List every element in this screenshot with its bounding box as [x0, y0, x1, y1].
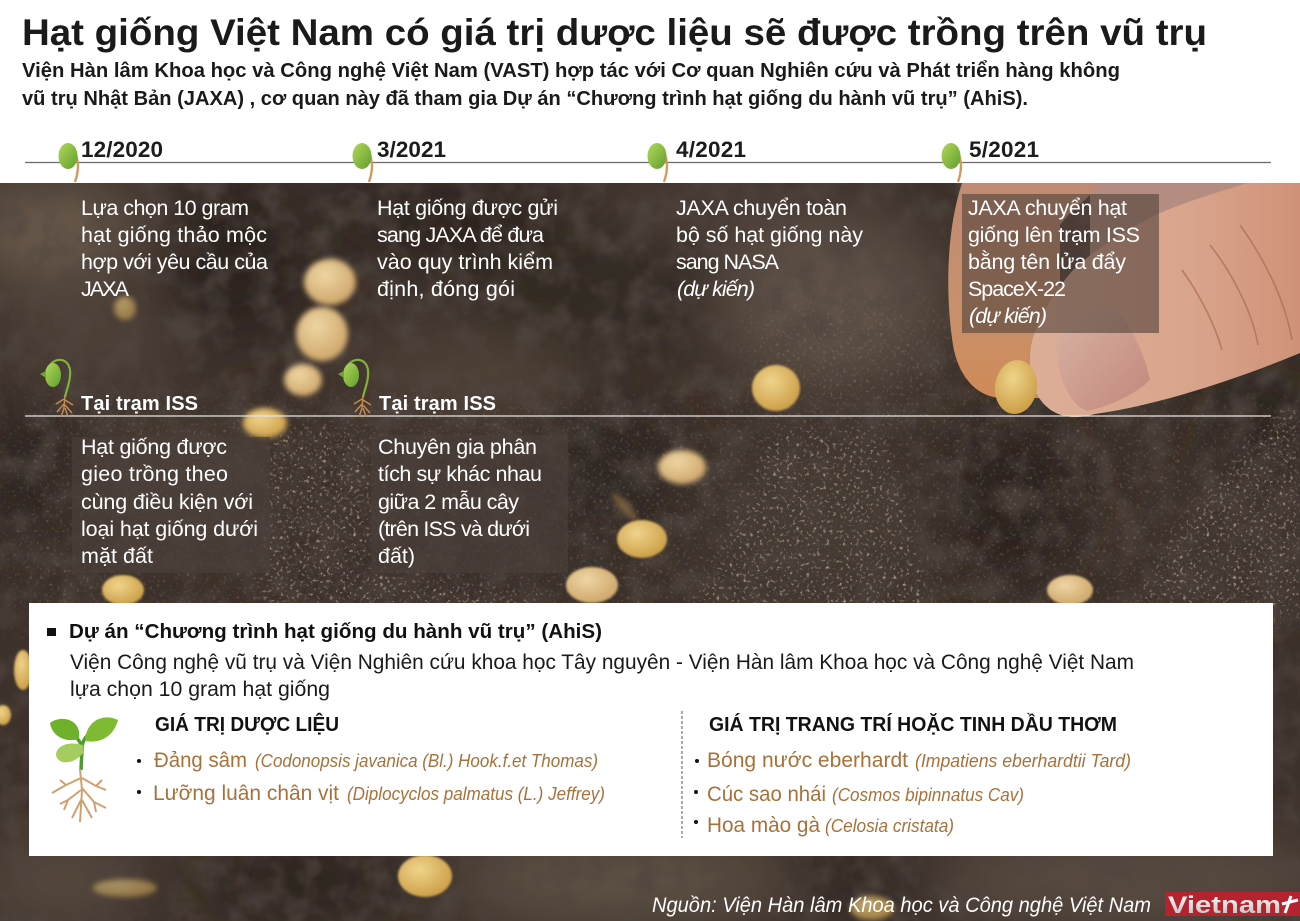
station stage 1: mặt đất — [81, 544, 153, 568]
column: decorative and aromatic value: Bóng nước eberhardt — [707, 749, 908, 772]
milestone 4/2021: 4/2021 — [676, 137, 746, 162]
column: medicinal value: Lưỡng luân chân vịt — [153, 782, 339, 805]
milestone 12/2020: JAXA — [81, 277, 130, 301]
logo: Vietnam+ — [1165, 892, 1300, 919]
station stage 2: Chuyên gia phân — [378, 435, 537, 459]
icon: sprout — [338, 360, 371, 417]
column: decorative and aromatic value: Cúc sao nhái — [707, 783, 826, 806]
milestone 5/2021 — [942, 137, 1159, 333]
text box — [962, 194, 1159, 333]
milestone 4/2021: bộ số hạt giống này — [676, 223, 863, 247]
timeline lower axis — [25, 415, 1271, 417]
milestone 5/2021: (dự kiến) — [969, 304, 1047, 328]
station stage 1 — [40, 360, 270, 573]
station stage 2 — [338, 360, 568, 573]
column: decorative and aromatic value: (Cosmos bipinnatus Cav) — [832, 785, 1024, 805]
source: Nguồn: Viện Hàn lâm Khoa học và Công nghệ Việt Nam — [652, 894, 1151, 917]
milestone 5/2021: bằng tên lửa đẩy — [968, 249, 1126, 274]
title: Hạt giống Việt Nam có giá trị dược liệu sẽ được trồng trên vũ trụ — [22, 12, 1207, 53]
milestone 3/2021: sang JAXA để đưa — [377, 223, 544, 247]
panel: AhiS project — [29, 603, 1273, 856]
seeds — [0, 259, 1093, 920]
milestone 12/2020: hợp với yêu cầu của — [81, 250, 268, 274]
panel description: Viện Công nghệ vũ trụ và Viện Nghiên cứu khoa học Tây nguyên - Viện Hàn lâm Khoa học và Công nghệ Việt Nam — [70, 651, 1134, 674]
milestone 4/2021: JAXA chuyển toàn — [676, 196, 847, 220]
milestone 4/2021: sang NASA — [676, 250, 780, 274]
icon: seed — [352, 143, 372, 182]
column: medicinal value: Đảng sâm — [154, 749, 247, 772]
panel description: lựa chọn 10 gram hạt giống — [70, 678, 330, 701]
timeline top axis — [25, 162, 1271, 164]
station stage 1: Tại trạm ISS — [81, 393, 198, 415]
column: decorative and aromatic value: (Impatiens eberhardtii Tard) — [915, 751, 1131, 771]
intro text: vũ trụ Nhật Bản (JAXA) , cơ quan này đã tham gia Dự án “Chương trình hạt giống du hành vũ trụ” (AhiS). — [22, 88, 1028, 110]
logo: Vietnam+: Vietnam — [1168, 892, 1281, 919]
column: decorative and aromatic value — [694, 713, 1131, 837]
sharp soil texture — [0, 290, 1300, 638]
milestone 4/2021: (dự kiến) — [677, 277, 755, 301]
milestone 3/2021: định, đóng gói — [377, 277, 515, 301]
station stage 1: Hạt giống được — [81, 435, 227, 459]
milestone 5/2021: 5/2021 — [969, 137, 1039, 162]
column: medicinal value: GIÁ TRỊ DƯỢC LIỆU — [155, 712, 339, 736]
station stage 2: (trên ISS và dưới — [378, 517, 530, 541]
station stage 2: giữa 2 mẫu cây — [378, 489, 519, 514]
column: decorative and aromatic value: Hoa mào gà — [707, 814, 820, 837]
station stage 2: đất) — [378, 544, 415, 568]
text box — [72, 437, 270, 573]
panel description — [70, 651, 1134, 701]
icon: plant with roots — [50, 717, 118, 822]
milestone 12/2020: hạt giống thảo mộc — [81, 223, 267, 247]
column: medicinal value — [137, 712, 605, 805]
station stage 1: loại hạt giống dưới — [81, 517, 258, 541]
milestone 12/2020: 12/2020 — [81, 137, 163, 162]
panel heading: Dự án “Chương trình hạt giống du hành vũ trụ” (AhiS) — [69, 621, 602, 643]
milestone 5/2021: SpaceX-22 — [968, 277, 1066, 301]
station stage 1: gieo trồng theo — [81, 462, 228, 486]
column: medicinal value: (Diplocyclos palmatus (L.) Jeffrey) — [347, 784, 605, 804]
column: medicinal value: (Codonopsis javanica (Bl.) Hook.f.et Thomas) — [255, 751, 598, 771]
column: decorative and aromatic value: GIÁ TRỊ TRANG TRÍ HOẶC TINH DẦU THƠM — [709, 713, 1117, 736]
milestone 4/2021 — [648, 137, 863, 301]
intro text — [22, 60, 1120, 110]
station stage 2: Tại trạm ISS — [379, 393, 496, 415]
milestone 3/2021: 3/2021 — [377, 137, 446, 162]
station stage 1: cùng điều kiện với — [81, 490, 253, 514]
intro text: Viện Hàn lâm Khoa học và Công nghệ Việt Nam (VAST) hợp tác với Cơ quan Nghiên cứu và Phát triển hàng không — [22, 60, 1120, 82]
milestone 3/2021: Hạt giống được gửi — [377, 196, 558, 220]
hand — [948, 183, 1300, 417]
milestone 5/2021: JAXA chuyển hạt — [968, 196, 1127, 220]
column: decorative and aromatic value: (Celosia cristata) — [825, 816, 954, 836]
milestone 12/2020 — [58, 137, 268, 301]
icon: seed — [648, 143, 667, 182]
milestone 12/2020: Lựa chọn 10 gram — [81, 196, 249, 220]
station stage 2: tích sự khác nhau — [378, 462, 542, 486]
milestone 3/2021: vào quy trình kiểm — [377, 250, 553, 274]
icon: seed — [58, 143, 78, 182]
icon: seed — [942, 143, 961, 182]
milestone 3/2021 — [352, 137, 558, 301]
text box — [371, 435, 568, 573]
icon: sprout — [40, 360, 73, 417]
milestone 5/2021: giống lên trạm ISS — [968, 223, 1140, 247]
